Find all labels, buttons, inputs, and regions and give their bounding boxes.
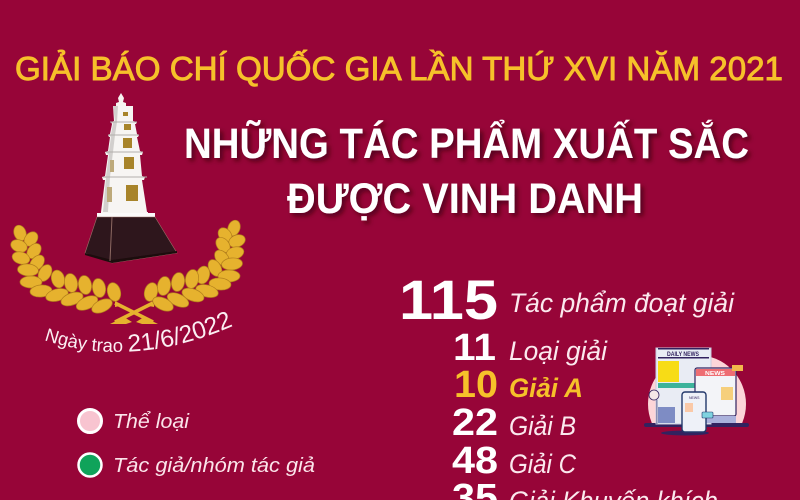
stat: 115 winning works: Tác phẩm đoạt giải bbox=[509, 288, 735, 318]
stat: 10 A prizes: 10 bbox=[454, 364, 498, 406]
stat: 115 winning works: 115 bbox=[399, 268, 498, 331]
heading: outstanding works honoured: NHỮNG TÁC PHẨM XUẤT SẮC bbox=[184, 119, 749, 168]
tower plinth bbox=[85, 217, 177, 263]
stat: 22 B prizes: Giải B bbox=[509, 411, 576, 441]
stat: 35 consolation prizes bbox=[452, 477, 718, 500]
legend: genre bbox=[78, 410, 190, 433]
tower tiers bbox=[101, 106, 148, 215]
legend: genre: Thể loại bbox=[113, 411, 190, 433]
icon: newspaper and devices: NEWS bbox=[689, 396, 700, 400]
icon: newspaper and devices: NEWS bbox=[705, 371, 725, 377]
left branch grains bbox=[12, 223, 28, 243]
stat: 115 winning works bbox=[399, 268, 735, 331]
newspaper bbox=[656, 348, 711, 424]
stat: 48 C prizes: 48 bbox=[452, 440, 498, 482]
stat: 11 award types: 11 bbox=[453, 327, 496, 369]
legend: author or author group: Tác giả/nhóm tác giả bbox=[113, 455, 315, 477]
stat: 22 B prizes: 22 bbox=[452, 402, 498, 444]
stat: 10 A prizes bbox=[454, 364, 583, 406]
heading: outstanding works honoured bbox=[184, 119, 749, 223]
stat: 48 C prizes: Giải C bbox=[509, 449, 576, 479]
phone bbox=[682, 392, 706, 432]
icon: newspaper and devices bbox=[644, 348, 749, 436]
crossed wreath stems bbox=[115, 303, 153, 322]
stat: 11 award types bbox=[453, 327, 608, 369]
notification badge bbox=[649, 390, 659, 400]
icon: newspaper and devices: DAILY NEWS bbox=[667, 352, 699, 358]
stat: 10 A prizes: Giải A bbox=[509, 373, 583, 403]
speech bubble bbox=[732, 365, 743, 371]
stat: 11 award types: Loại giải bbox=[509, 336, 608, 366]
icon: tower monument bbox=[85, 93, 177, 263]
title: award name: GIẢI BÁO CHÍ QUỐC GIA LẦN THỨ XVI NĂM 2021 bbox=[15, 49, 783, 87]
right branch grains bbox=[226, 218, 242, 238]
stat: 48 C prizes bbox=[452, 440, 576, 482]
icon: golden laurel wreath bbox=[9, 218, 247, 324]
heading: outstanding works honoured: ĐƯỢC VINH DANH bbox=[287, 175, 643, 223]
curved date caption: Ngày trao 21/6/2022 bbox=[46, 312, 232, 352]
stat: 22 B prizes bbox=[452, 402, 576, 444]
tablet bbox=[695, 368, 736, 416]
tower windows bbox=[123, 112, 138, 201]
